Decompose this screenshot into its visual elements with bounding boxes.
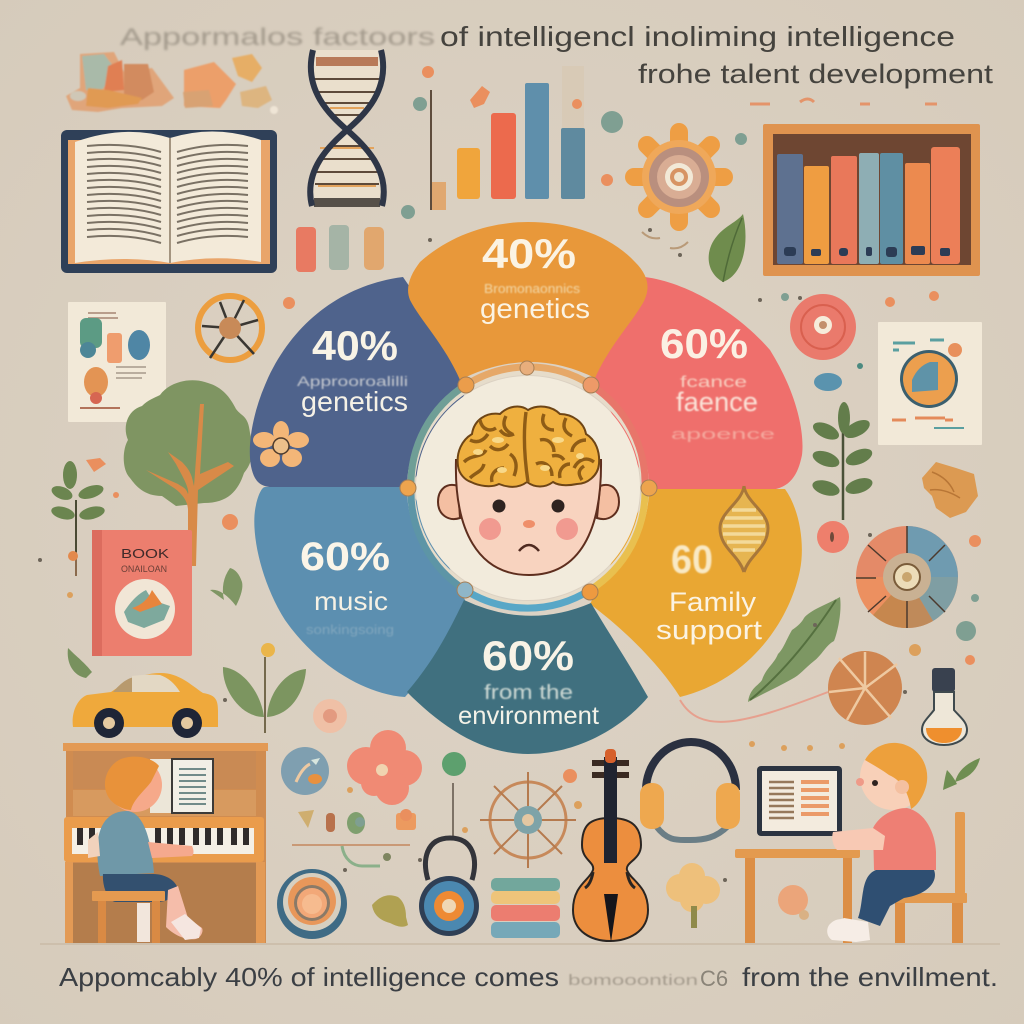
stool [92,891,165,943]
segment: top orange: Bromonaonnics [484,281,581,296]
segment: lower right yellow: 60 [671,538,713,582]
segment: lower right yellow: support [656,615,763,645]
icon: light bulb [922,668,967,745]
ring [411,367,645,608]
segment: bottom teal: from the [484,682,573,704]
icon: bookshelf [763,124,980,276]
segment: right red: apoence [671,426,775,443]
central brain circle [400,361,657,608]
icon: top-left blocks [66,52,174,112]
icon: red badge [790,294,856,360]
icon: DNA on yellow segment [720,486,768,572]
icon: ship wheel [480,772,576,868]
icon: branch with leaves [810,402,875,520]
icon: open book [61,130,277,273]
icon: flower on chart [253,421,309,467]
icon: small green charm [442,752,466,837]
illustration: child at desk [735,743,967,943]
icon: DNA helix [310,50,384,207]
panel: left note card [68,302,166,422]
segment: lower left blue: 60% [300,535,390,579]
icon: small leaves [210,568,242,606]
icon: book cover: BOOK [121,546,169,561]
icon: wooden wedge circle [828,651,902,725]
icon: small shell [313,699,347,733]
segment: lower left blue: sonkingsoing [306,622,394,637]
segment: lower left blue [254,487,465,697]
tablet [757,766,842,836]
segment: top orange: 40% [482,230,576,277]
icon: concentric disc [277,869,347,939]
caption [59,962,998,992]
segment: bottom teal: environment [458,702,599,730]
icon: peach flower [347,730,422,805]
icon: round bubble [281,747,329,795]
arrow: pink curve [680,692,828,722]
caption: C6 [700,966,728,991]
icon: peach knot [778,885,809,920]
icon: autumn leaf [922,462,978,518]
panel: right note card [878,322,982,445]
segment: right red [590,277,803,490]
icon: leaf sprig left [50,461,106,576]
icon: small sprout [68,648,92,678]
segment: upper left navy: genetics [301,386,408,417]
icon: leaf cluster [183,54,278,114]
icon: violin [573,749,648,942]
icon: headphones [640,742,740,840]
icon: car [73,673,218,738]
title [120,21,994,89]
icon: small charms row [292,810,416,866]
segment: top orange [408,222,648,380]
segment: right red: 60% [660,320,748,367]
icon: small leaf pair [943,758,980,790]
chair [890,812,967,943]
title: of intelligencl inoliming intelligence [440,21,955,52]
icon: wheel [198,296,262,360]
icon: large leaf branch [748,597,841,702]
icon: two leaf plant [223,643,306,733]
segment: lower right yellow [590,489,802,697]
caption: bomooontion [568,972,698,989]
brain [458,407,599,487]
title: frohe talent development [638,59,994,89]
caption: Appomcably 40% of intelligence comes [59,962,559,992]
icon: gold flower [666,863,720,928]
illustration: child at piano [63,743,268,943]
icon: book cover [92,530,192,656]
icon: gear [634,132,724,222]
segment: bottom teal: 60% [482,632,574,679]
icon: tree [124,380,252,566]
bar chart [431,66,585,210]
segment: upper left navy [250,277,470,487]
icon: small vials [296,225,384,272]
segment: upper left navy: Approoroalilli [297,373,408,389]
main chart: petals [250,222,803,754]
decorative confetti [38,66,981,882]
icon: small leaf bottom [372,895,408,927]
segment: right red: faence [676,387,758,417]
icon: red donut [817,521,849,553]
connector dots [400,361,657,600]
icon: pie wheel [856,526,958,628]
icon: leaf [709,214,746,282]
icon: book cover: ONAILOAN [121,564,167,574]
segment: right red: fcance [680,374,747,391]
desk [735,849,860,943]
segment: upper left navy: 40% [312,322,398,369]
sheet music [150,759,213,813]
segment: lower left blue: music [314,586,388,616]
icon: stacked books [491,878,560,938]
child [827,743,936,942]
title: Appormalos factoors [120,24,435,51]
icon: padlock [419,838,479,936]
child face [438,460,619,575]
segment: lower right yellow: Family [669,587,757,617]
segment: top orange: genetics [480,293,590,324]
caption: from the envillment. [742,962,998,992]
icon: blue blob [814,363,863,391]
segment: bottom teal [407,600,648,754]
child figure [88,757,203,942]
